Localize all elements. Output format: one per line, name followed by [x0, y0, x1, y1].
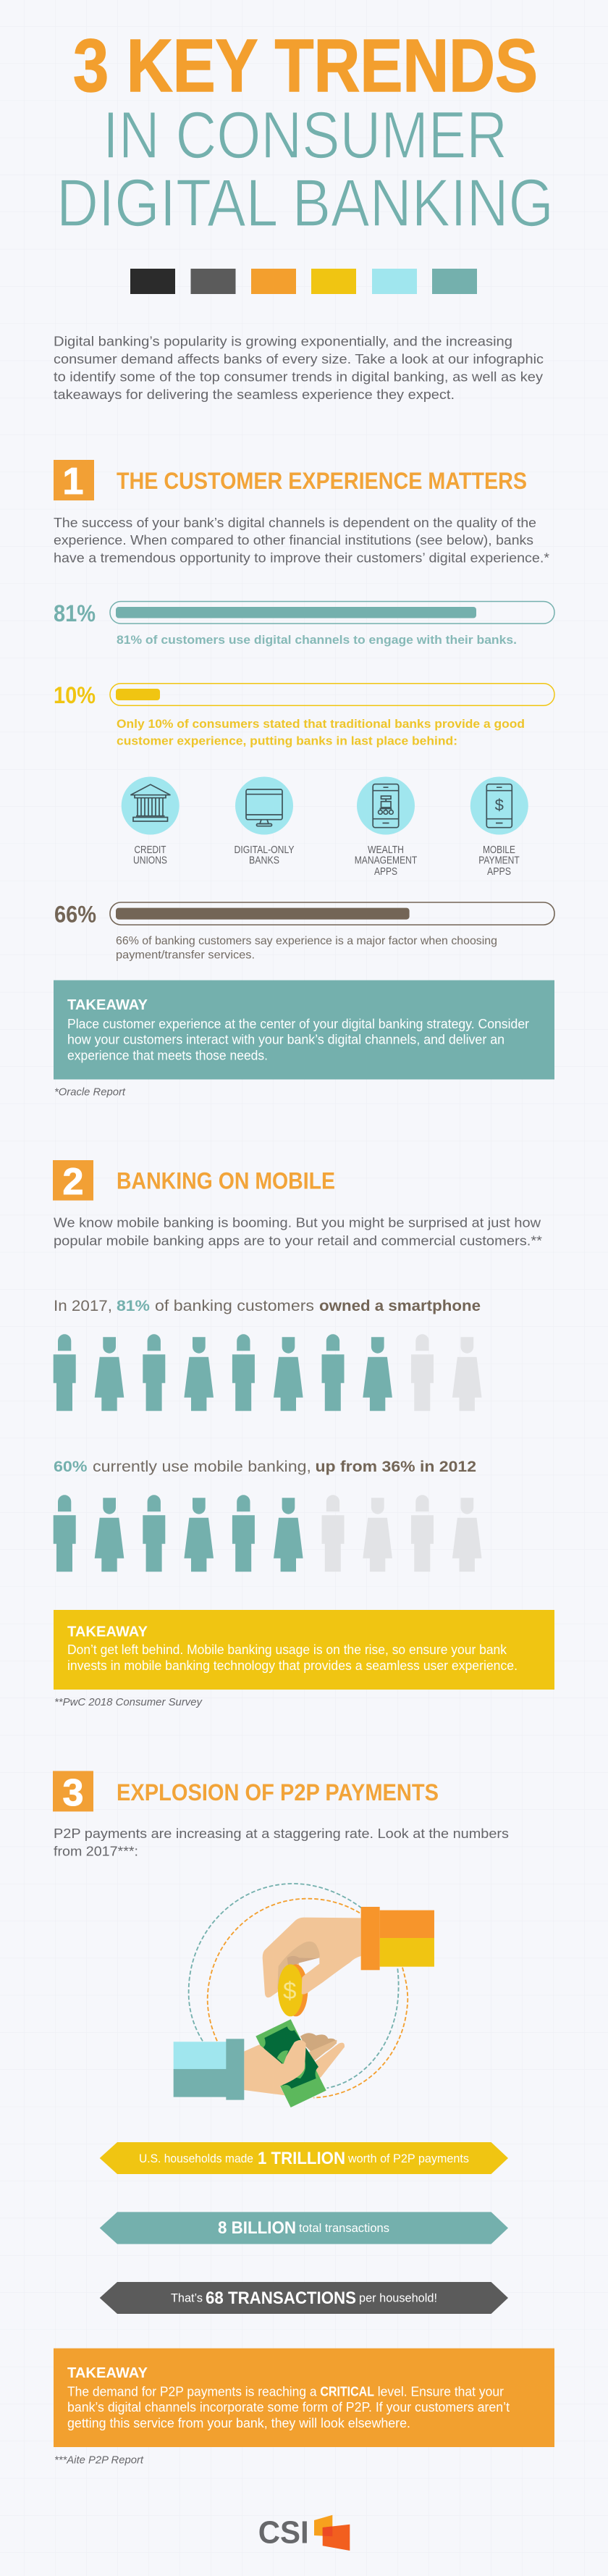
bottom hand fingers	[300, 2033, 337, 2057]
panel: section 2	[53, 1160, 554, 1708]
top sleeve	[380, 1910, 434, 1938]
title	[56, 24, 554, 240]
icon: mobile payment apps: MOBILE	[483, 844, 515, 856]
icon: wealth management apps: APPS	[374, 866, 397, 878]
icon: credit unions: UNIONS	[133, 855, 167, 867]
section 3 intro text: P2P payments are increasing at a staggering rate. Look at the numbers	[54, 1826, 509, 1841]
dashed circles	[189, 1884, 408, 2098]
banner: 1 trillion	[100, 2142, 508, 2174]
stat heading: smartphone: In 2017,	[54, 1297, 112, 1314]
stat heading: smartphone: of banking customers	[155, 1297, 314, 1314]
banner: 1 trillion: worth of P2P payments	[347, 2152, 469, 2165]
section 3 number	[53, 1771, 93, 1814]
stat heading: mobile banking: up from 36% in 2012	[316, 1458, 476, 1475]
callout: takeaway 3: The demand for P2P payments is reaching a	[67, 2384, 318, 2399]
top hand	[263, 1918, 361, 1997]
pictogram: 60% use mobile banking	[54, 1495, 481, 1572]
bar chart: 81%	[54, 600, 554, 647]
stat heading: smartphone	[54, 1297, 481, 1314]
icon: wealth management apps: MANAGEMENT	[355, 855, 417, 867]
intro text: Digital banking’s popularity is growing exponentially, and the increasing	[54, 333, 512, 349]
stat heading: mobile banking: 60%	[54, 1458, 87, 1475]
section 3 intro text	[54, 1826, 509, 1858]
section 2 intro text: popular mobile banking apps are to your retail and commercial customers.**	[54, 1233, 542, 1248]
bar chart: 81%: 81%	[54, 600, 96, 626]
icon: mobile payment apps	[470, 776, 528, 878]
section 2 number: 2	[63, 1161, 83, 1203]
callout: takeaway 1	[54, 981, 554, 1079]
callout: takeaway 3: TAKEAWAY	[67, 2365, 148, 2381]
callout: takeaway 3: getting this service from your bank, they will look elsewhere.	[67, 2416, 410, 2430]
bar chart: 66%: 66%	[54, 902, 96, 928]
intro text: consumer demand affects banks of every size. Take a look at our infographic	[54, 351, 544, 366]
section 2 intro text: We know mobile banking is booming. But you might be surprised at just how	[54, 1215, 541, 1230]
callout: takeaway 3	[54, 2349, 554, 2447]
icon: digital-only banks	[235, 776, 295, 867]
bottom hand	[244, 2040, 306, 2095]
stat heading: mobile banking	[54, 1458, 476, 1475]
bar chart: 66%: 66% of banking customers say experience is a major factor when choosing	[116, 935, 497, 947]
bar chart: 10%: customer experience, putting banks in last place behind:	[117, 734, 457, 748]
banner: 8 billion: total transactions	[299, 2221, 389, 2235]
illustration: hands exchanging coin and cash: $	[283, 1978, 297, 2005]
bar chart: 81%: 81% of customers use digital channels to engage with their banks.	[117, 633, 517, 647]
bar chart: 66%	[54, 902, 554, 962]
bar chart: 66%: payment/transfer services.	[116, 949, 255, 962]
illustration: hands exchanging coin and cash	[174, 1884, 434, 2107]
section 3 number: 3	[63, 1772, 83, 1814]
green crescent beside thumb	[295, 2057, 305, 2078]
footnote: PwC: **PwC 2018 Consumer Survey	[54, 1696, 203, 1708]
callout: takeaway 1: TAKEAWAY	[67, 997, 148, 1013]
coin	[284, 1964, 308, 2016]
title: IN CONSUMER	[103, 98, 507, 172]
stat heading: smartphone: owned a smartphone	[319, 1297, 481, 1314]
section 1 intro text	[54, 515, 549, 565]
panel: section 1	[54, 460, 554, 1099]
section 1 number	[54, 460, 94, 503]
banner: 8 billion	[100, 2212, 508, 2244]
callout: takeaway 1: Place customer experience at the center of your digital banking strategy. Consider	[67, 1017, 529, 1031]
bottom sleeve	[174, 2042, 227, 2069]
banner: 68 transactions: That’s	[171, 2291, 203, 2304]
banner: 1 trillion: U.S. households made	[139, 2152, 253, 2165]
callout: takeaway 2	[54, 1610, 554, 1690]
callout: takeaway 3: bank’s digital channels incorporate some form of P2P. If your customers aren’t	[67, 2400, 510, 2415]
banner: 8 billion: 8 BILLION	[218, 2218, 296, 2238]
callout: takeaway 1: experience that meets those needs.	[67, 1048, 268, 1062]
callout: takeaway 2: invests in mobile banking technology that provides a seamless user experience.	[67, 1658, 518, 1673]
stat heading: smartphone: 81%	[117, 1297, 150, 1314]
icon: credit unions: CREDIT	[135, 844, 166, 856]
icon: mobile payment apps: $	[495, 796, 504, 814]
intro text: takeaways for delivering the seamless experience they expect.	[54, 387, 455, 402]
section 3 intro text: from 2017***:	[54, 1844, 138, 1858]
icon: mobile payment apps: PAYMENT	[478, 855, 520, 867]
banknote	[256, 2019, 326, 2107]
section 2 number	[53, 1160, 93, 1203]
colour swatches	[130, 269, 477, 294]
title: 3 KEY TRENDS	[73, 24, 538, 107]
intro text	[54, 333, 544, 402]
banner: 68 transactions: per household!	[359, 2291, 437, 2304]
section 1 heading: THE CUSTOMER EXPERIENCE MATTERS	[117, 468, 527, 494]
callout: takeaway 2: TAKEAWAY	[67, 1624, 148, 1640]
panel: section 3	[53, 1771, 554, 2467]
icon: wealth management apps	[355, 776, 417, 878]
icon: mobile payment apps: APPS	[487, 866, 511, 878]
footnote: Oracle: *Oracle Report	[54, 1086, 126, 1099]
callout: takeaway 3: level. Ensure that your	[378, 2384, 504, 2399]
icon: credit unions	[122, 776, 180, 867]
banner: 1 trillion: 1 TRILLION	[258, 2149, 345, 2168]
callout: takeaway 1: how your customers interact with your bank’s digital channels, and deliver an	[67, 1033, 504, 1047]
section 1 intro text: The success of your bank’s digital channels is dependent on the quality of the	[54, 515, 536, 530]
section 3 heading: EXPLOSION OF P2P PAYMENTS	[117, 1779, 439, 1805]
callout: takeaway 3: CRITICAL	[320, 2384, 374, 2399]
stat heading: mobile banking: currently use mobile banking,	[93, 1458, 311, 1475]
callout: takeaway 2: Don’t get left behind. Mobile banking usage is on the rise, so ensure your bank	[67, 1642, 507, 1657]
footnote: Aite: ***Aite P2P Report	[54, 2454, 144, 2467]
section 1 number: 1	[63, 461, 83, 503]
icon: digital-only banks: BANKS	[249, 855, 279, 867]
banner: 68 transactions: 68 TRANSACTIONS	[206, 2288, 356, 2308]
section 1 intro text: have a tremendous opportunity to improve their customers’ digital experience.*	[54, 550, 549, 565]
icon: wealth management apps: WEALTH	[368, 844, 404, 856]
intro text: to identify some of the top consumer trends in digital banking, as well as key	[54, 369, 544, 384]
bar chart: 10%	[54, 682, 554, 748]
banner: 68 transactions	[100, 2282, 508, 2314]
logo: CSI: CSI	[258, 2514, 309, 2551]
bar chart: 10%: Only 10% of consumers stated that traditional banks provide a good	[117, 717, 525, 731]
section 2 intro text	[54, 1215, 542, 1248]
icon: digital-only banks: DIGITAL-ONLY	[235, 844, 295, 856]
section 2 heading: BANKING ON MOBILE	[117, 1168, 335, 1194]
logo: CSI	[258, 2514, 350, 2551]
bar chart: 10%: 10%	[54, 682, 96, 708]
section 1 intro text: experience. When compared to other financial institutions (see below), banks	[54, 532, 533, 547]
pictogram: 81% own a smartphone	[54, 1334, 481, 1411]
